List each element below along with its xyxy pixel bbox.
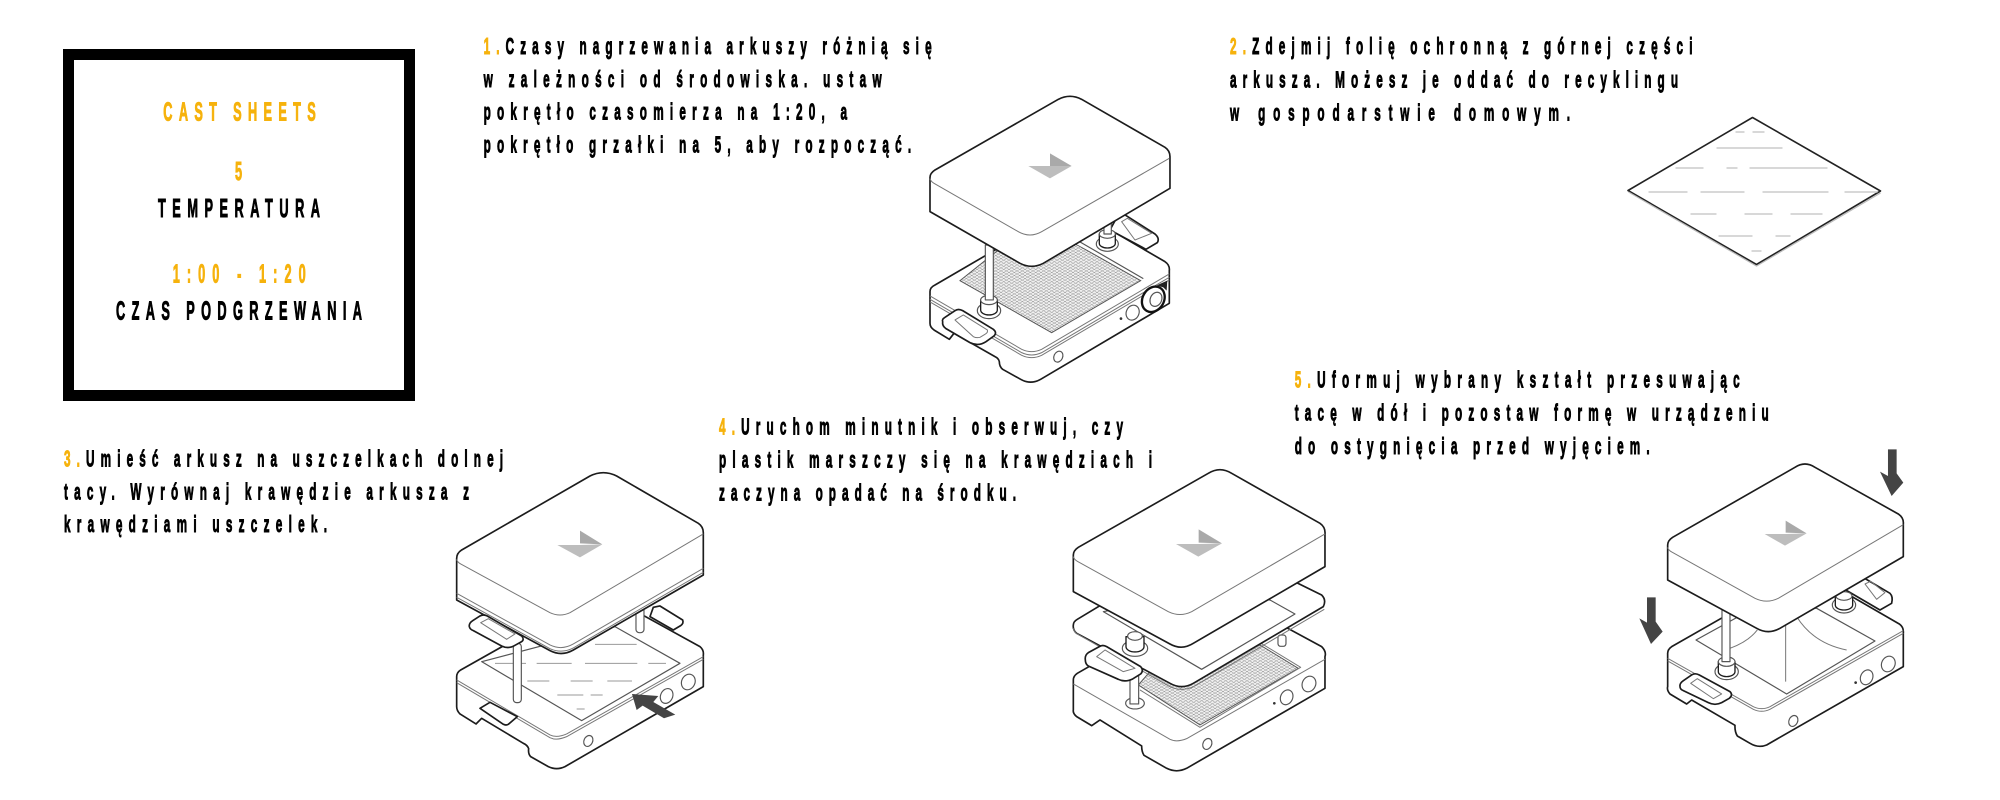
arrow: press right (1880, 449, 1903, 496)
arrow: slide sheet in (632, 694, 675, 718)
step 1 text: pokrętło czasomierza na 1:20, a (484, 98, 848, 125)
temperature label: TEMPERATURA (158, 195, 320, 223)
step 4 text (719, 413, 1152, 506)
logo (1765, 521, 1807, 546)
device illustration: step 1 (930, 96, 1170, 382)
arrow: rotate dial (1157, 281, 1167, 291)
logo (1028, 153, 1072, 178)
heating time label: CZAS PODGRZEWANIA (116, 298, 362, 326)
device illustration: step 4 (1073, 470, 1325, 771)
step 5 text (1295, 366, 1769, 459)
step 5 text: do ostygnięcia przed wyjęciem. (1295, 432, 1650, 459)
heading: cast sheets: CAST SHEETS (163, 99, 316, 127)
device illustration: step 3 (457, 473, 703, 769)
step 4 text: plastik marszczy się na krawędziach i (719, 446, 1152, 473)
step 2 text (1229, 32, 1692, 126)
logo (557, 531, 602, 557)
heating time value: 1:00 - 1:20 (173, 261, 306, 289)
step 2 text: w gospodarstwie domowym. (1229, 99, 1570, 126)
step 5 text: 5. Uformuj wybrany kształt przesuwając (1295, 366, 1740, 392)
step 3 text (64, 445, 503, 537)
step 1 text: 1. Czasy nagrzewania arkuszy różnią się (484, 32, 932, 59)
box frame (68, 54, 410, 396)
step 3 text: krawędziami uszczelek. (64, 510, 327, 537)
sheet illustration: step 2 (1628, 118, 1880, 266)
logo (1176, 529, 1222, 557)
step 4 text: zaczyna opadać na środku. (719, 479, 1016, 506)
step 3 text: 3. Umieść arkusz na uszczelkach dolnej (64, 445, 503, 472)
step 3 text: tacy. Wyrównaj krawędzie arkusza z (64, 478, 469, 504)
step 2 text: arkusza. Możesz je oddać do recyklingu (1230, 66, 1678, 93)
step 1 text: w zależności od środowiska. ustaw (483, 65, 882, 92)
step 2 text: 2. Zdejmij folię ochronną z górnej części (1230, 32, 1692, 59)
arrow: press left (1639, 597, 1663, 644)
panel: settings box (68, 54, 410, 396)
step 1 text (483, 32, 932, 158)
step 5 text: tacę w dół i pozostaw formę w urządzeniu (1295, 399, 1769, 426)
temperature value: 5 (235, 158, 242, 186)
step 1 text: pokrętło grzałki na 5, aby rozpocząć. (484, 131, 911, 158)
device illustration: step 5 (1639, 449, 1903, 746)
step 4 text: 4. Uruchom minutnik i obserwuj, czy (719, 413, 1123, 440)
